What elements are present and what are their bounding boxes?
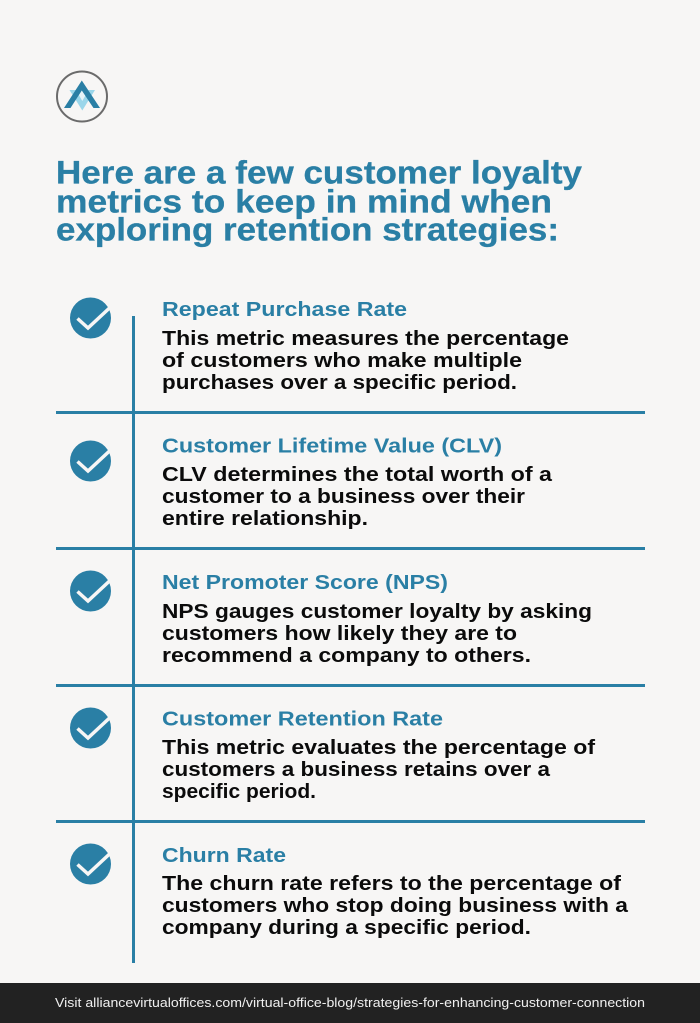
panel: customer lifetime value — [70, 436, 553, 530]
text: customer retention rate description: specific period. — [162, 780, 316, 803]
icon: check mark — [70, 570, 111, 612]
divider lines — [56, 411, 645, 823]
text: net promoter score description: recommend a company to others. — [162, 644, 531, 667]
panel: customer retention rate — [70, 708, 595, 803]
text: churn rate description: customers who stop doing business with a — [162, 894, 629, 917]
icon: check mark — [70, 844, 111, 884]
panel: repeat purchase rate — [70, 298, 569, 394]
text: customer lifetime value description — [162, 463, 553, 530]
text: repeat purchase rate description: of customers who make multiple — [162, 349, 522, 372]
text: customer retention rate description: customers a business retains over a — [162, 758, 551, 781]
title — [56, 154, 582, 248]
heading: churn rate: Churn Rate — [162, 845, 286, 867]
footer bar — [0, 983, 700, 1023]
footer bar: Visit alliancevirtualoffices.com/virtual-office-blog/strategies-for-enhancing-customer-connection — [55, 995, 645, 1010]
title: metrics to keep in mind when — [56, 184, 552, 220]
text: customer lifetime value description: CLV determines the total worth of a — [162, 463, 553, 486]
icon: check mark — [70, 708, 111, 748]
text: repeat purchase rate description: This metric measures the percentage — [162, 327, 569, 350]
text: churn rate description: The churn rate refers to the percentage of — [162, 872, 621, 895]
text: net promoter score description: NPS gauges customer loyalty by asking — [162, 600, 592, 623]
heading: customer lifetime value: Customer Lifetime Value (CLV) — [162, 436, 502, 458]
heading: net promoter score: Net Promoter Score (NPS) — [162, 572, 448, 594]
text: customer retention rate description: This metric evaluates the percentage of — [162, 736, 595, 759]
text: customer lifetime value description: customer to a business over their — [162, 485, 525, 508]
title: exploring retention strategies: — [56, 212, 559, 248]
text: net promoter score description — [162, 600, 592, 667]
icon: check mark — [70, 440, 111, 482]
panel: net promoter score — [70, 570, 592, 667]
text: repeat purchase rate description — [162, 327, 569, 394]
heading: repeat purchase rate: Repeat Purchase Rate — [162, 299, 407, 321]
vertical timeline line — [132, 316, 135, 963]
text: churn rate description: company during a specific period. — [162, 916, 531, 939]
panel: churn rate — [70, 844, 629, 939]
icon: company logo — [57, 72, 107, 122]
text: customer lifetime value description: entire relationship. — [162, 507, 368, 530]
text: net promoter score description: customers how likely they are to — [162, 622, 517, 645]
title: Here are a few customer loyalty — [56, 154, 582, 190]
text: repeat purchase rate description: purchases over a specific period. — [162, 371, 517, 394]
text: customer retention rate description — [162, 736, 595, 803]
icon: check mark — [70, 298, 111, 338]
heading: customer retention rate: Customer Retention Rate — [162, 708, 443, 730]
text: churn rate description — [162, 872, 629, 939]
